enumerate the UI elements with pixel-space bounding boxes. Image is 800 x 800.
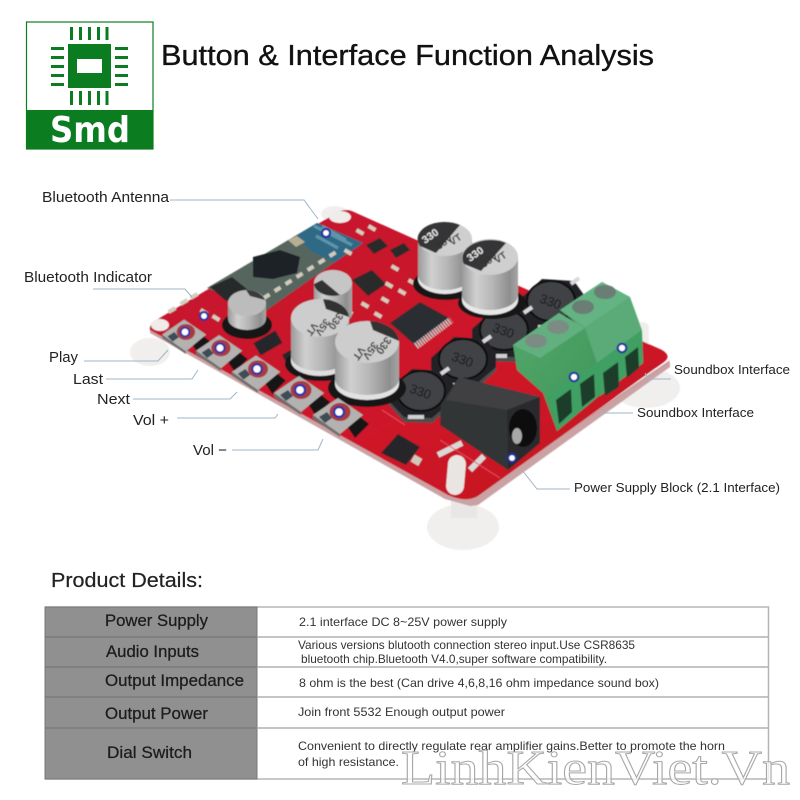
label: Bluetooth Indicator: Bluetooth Indicator: [24, 270, 152, 286]
capacitor rear right: [458, 239, 526, 319]
push buttons: [162, 320, 211, 355]
green screw terminal left: [513, 313, 600, 431]
row headers: Power Supply: [105, 612, 209, 630]
DC power jack: [440, 377, 540, 470]
row headers: [105, 612, 244, 762]
row descriptions: Convenient to directly regulate rear amplifier gains.Better to promote the horn: [298, 739, 725, 753]
row descriptions: 2.1 interface DC 8~25V power supply: [299, 615, 507, 629]
capacitor front right: [328, 321, 406, 407]
callout labels: [24, 190, 790, 495]
board underside edge: [150, 325, 670, 504]
diode and power traces: [381, 410, 500, 496]
inductors: [519, 276, 584, 333]
diagram: amplifier board photo illustration: [130, 206, 680, 550]
capacitor rear left: [413, 222, 479, 300]
leader lines: [84, 200, 671, 489]
capacitor rear right: VT: [492, 250, 509, 266]
heading: Product Details: Product Details:: [51, 570, 203, 592]
logo: SMD chip: Smd: [50, 110, 130, 151]
marker dots: [200, 229, 626, 462]
title: Button & Interface Function Analysis: [161, 40, 654, 72]
red PCB: [150, 210, 668, 499]
suction cups: [130, 206, 680, 550]
amplifier IC: [390, 302, 451, 346]
row descriptions: [298, 615, 725, 769]
capacitor front left: VT: [303, 320, 320, 337]
label: Vol +: Vol +: [133, 412, 169, 429]
label: Vol −: Vol −: [193, 442, 227, 459]
label: Power Supply Block: Power Supply Block (2.1 Interface): [574, 480, 780, 495]
watermark: LinhKienViet.Vn: [401, 740, 790, 795]
row headers: Audio Inputs: [106, 643, 199, 661]
row headers: Dial Switch: [107, 744, 192, 762]
capacitor front right: 330: [373, 334, 393, 356]
capacitor front right: 35V: [360, 339, 380, 361]
green screw terminal right: [560, 282, 643, 396]
label: Play: Play: [49, 349, 78, 366]
capacitor front left: 330: [325, 310, 345, 332]
row headers: Output Impedance: [105, 672, 244, 690]
small capacitor rear: [314, 270, 352, 324]
capacitor rear right: 35V: [479, 251, 501, 270]
capacitor rear left: 330: [420, 226, 441, 246]
capacitor rear left: 35V: [434, 233, 456, 252]
row descriptions: of high resistance.: [298, 755, 399, 769]
row descriptions: 8 ohm is the best (Can drive 4,6,8,16 ohm impedance sound box): [299, 676, 659, 690]
label: Soundbox Interface lower: Soundbox Interface: [637, 405, 754, 420]
logo: SMD chip: [26, 22, 153, 151]
row descriptions: Join front 5532 Enough output power: [298, 705, 505, 719]
label: Bluetooth Antenna: Bluetooth Antenna: [42, 190, 170, 206]
row descriptions: bluetooth chip.Bluetooth V4.0,super software compatibility.: [301, 652, 607, 666]
label: Last: Last: [73, 371, 104, 388]
label: Soundbox Interface right: Soundbox Interface: [674, 362, 790, 377]
small capacitor front: [222, 290, 272, 339]
capacitor front left: 35V: [312, 316, 332, 337]
capacitor rear right: 330: [465, 244, 486, 264]
board corner cutouts: [151, 211, 351, 331]
capacitor rear left: VT: [447, 232, 464, 248]
row headers: Output Power: [105, 705, 209, 723]
table: product details: [45, 607, 768, 779]
label: Next: Next: [97, 391, 131, 408]
bluetooth module: [207, 223, 363, 312]
capacitor front left: [285, 299, 357, 381]
small SMD parts: [168, 224, 416, 362]
capacitor front right: VT: [350, 344, 367, 363]
row descriptions: Various versions blutooth connection stereo input.Use CSR8635: [298, 638, 635, 652]
